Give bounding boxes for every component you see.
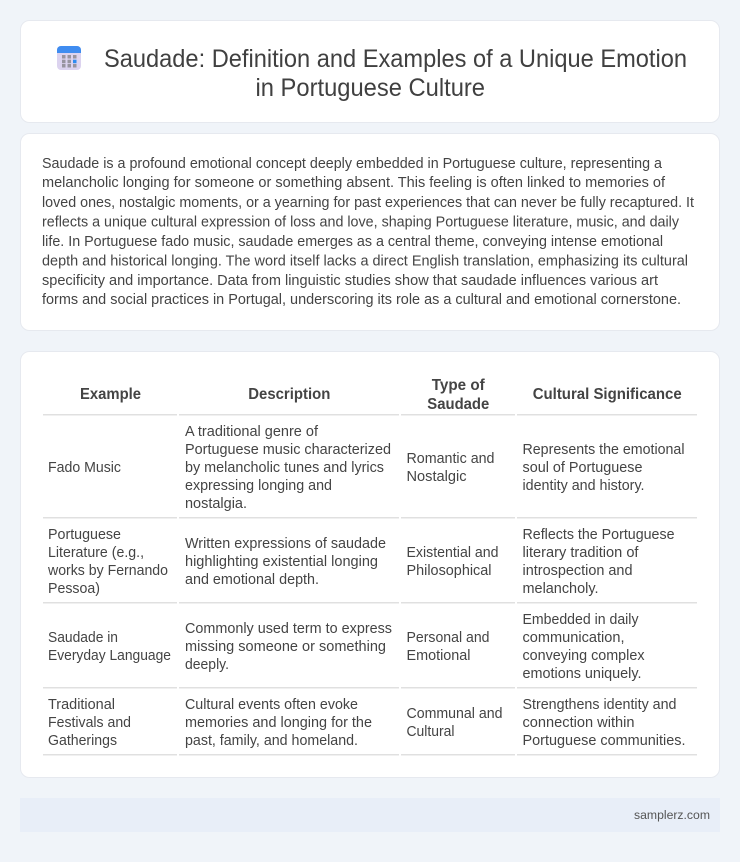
- table header: Description: [248, 386, 330, 403]
- panel: title card: [20, 20, 720, 122]
- row: Portuguese Literature: Written expressions of saudade: [185, 536, 386, 552]
- table header: Type of: [432, 377, 486, 394]
- row: Fado Music: Fado Music: [48, 460, 121, 476]
- row: Saudade in Everyday Language: Embedded in daily: [522, 612, 639, 628]
- title: [104, 45, 687, 102]
- row: Portuguese Literature: Pessoa): [48, 581, 100, 597]
- table header: Example: [80, 386, 141, 403]
- table rules: [43, 414, 697, 756]
- row: Saudade in Everyday Language: Saudade in: [48, 630, 118, 646]
- row: Traditional Festivals and Gatherings: memories and longing for the: [185, 715, 372, 731]
- row: Fado Music: Nostalgic: [406, 469, 466, 485]
- icon: calendar: [57, 46, 81, 70]
- footer text: samplerz.com: [634, 808, 710, 822]
- row: Traditional Festivals and Gatherings: Cultural events often evoke: [185, 697, 358, 713]
- row: Traditional Festivals and Gatherings: Cultural: [406, 724, 454, 740]
- row: Fado Music: Portuguese music characterized: [185, 442, 391, 458]
- row: Saudade in Everyday Language: Commonly used term to express: [185, 621, 392, 637]
- row: Fado Music: nostalgia.: [185, 496, 247, 512]
- row: Portuguese Literature: Literature (e.g.,: [48, 545, 144, 561]
- table header: Saudade: [427, 396, 490, 413]
- row: Portuguese Literature: and emotional depth.: [185, 572, 319, 588]
- panel: examples table: [20, 352, 720, 778]
- row: Portuguese Literature: works by Fernando: [47, 563, 168, 579]
- text block: definition: melancholic longing for someone or something absent. This feeling is often linked to memories of: [42, 175, 665, 191]
- row: Traditional Festivals and Gatherings: connection within: [522, 715, 635, 731]
- row: Traditional Festivals and Gatherings: Traditional: [48, 697, 115, 713]
- row: Saudade in Everyday Language: emotions uniquely.: [522, 666, 642, 682]
- row: Fado Music: Romantic and: [406, 451, 495, 467]
- row: Traditional Festivals and Gatherings: Festivals and: [48, 715, 131, 731]
- row: Fado Music: by melancholic tunes and lyrics: [185, 460, 384, 476]
- row: Traditional Festivals and Gatherings: Gatherings: [48, 733, 117, 749]
- row: Traditional Festivals and Gatherings: [48, 697, 686, 749]
- row: Portuguese Literature: melancholy.: [522, 581, 598, 597]
- row: Portuguese Literature: introspection and: [522, 563, 633, 579]
- table header: [80, 377, 682, 413]
- title: in Portuguese Culture: [256, 74, 485, 102]
- text block: definition: reflects a unique cultural expression of loss and love, shaping Portuguese literature, music, and daily: [42, 214, 680, 230]
- row: Fado Music: A traditional genre of: [185, 424, 318, 440]
- row: Portuguese Literature: Existential and: [406, 545, 499, 561]
- table header: Cultural Significance: [533, 386, 682, 403]
- row: Portuguese Literature: highlighting existential longing: [185, 554, 378, 570]
- row: Fado Music: identity and history.: [522, 478, 644, 494]
- row: Fado Music: expressing longing and: [185, 478, 332, 494]
- row: Saudade in Everyday Language: Emotional: [406, 648, 470, 664]
- title: Saudade: Definition and Examples of a Unique Emotion: [104, 45, 687, 73]
- row: Saudade in Everyday Language: missing someone or something: [185, 639, 386, 655]
- row: Saudade in Everyday Language: communication,: [522, 630, 624, 646]
- row: Fado Music: soul of Portuguese: [522, 460, 643, 476]
- row: Traditional Festivals and Gatherings: past, family, and homeland.: [185, 733, 358, 749]
- row: Saudade in Everyday Language: conveying complex: [522, 648, 644, 664]
- panel: intro paragraph: [20, 134, 720, 330]
- row: Traditional Festivals and Gatherings: Communal and: [406, 706, 503, 722]
- row: Saudade in Everyday Language: Personal and: [406, 630, 490, 646]
- text block: definition: forms and social practices in Portugal, underscoring its role as a cultural and emotional cornerstone.: [42, 292, 681, 308]
- row: Saudade in Everyday Language: deeply.: [185, 657, 229, 673]
- row: Portuguese Literature: literary tradition of: [522, 545, 639, 561]
- row: Traditional Festivals and Gatherings: Strengthens identity and: [522, 697, 677, 713]
- text block: definition: specificity and importance. Data from linguistic studies show that saudade influences various art: [42, 273, 658, 289]
- row: Saudade in Everyday Language: [48, 612, 644, 682]
- text block: definition: loved ones, nostalgic moments, or a yearning for past experiences that can never be fully recaptured. It: [42, 195, 694, 211]
- text block: definition: depth and historical longing. The word itself lacks a direct English translation, emphasizing its cultural: [42, 254, 688, 270]
- footer bar: [20, 798, 720, 832]
- text block: definition: [42, 156, 694, 308]
- row: Fado Music: [48, 424, 684, 512]
- row: Traditional Festivals and Gatherings: Portuguese communities.: [522, 733, 686, 749]
- text block: definition: life. In Portuguese fado music, saudade emerges as a central theme, conveying intense emotional: [42, 234, 663, 250]
- row: Saudade in Everyday Language: Everyday Language: [48, 648, 171, 664]
- row: Fado Music: Represents the emotional: [522, 442, 684, 458]
- row: Portuguese Literature: [47, 527, 675, 597]
- row: Portuguese Literature: Reflects the Portuguese: [522, 527, 675, 543]
- row: Portuguese Literature: Portuguese: [48, 527, 121, 543]
- row: Portuguese Literature: Philosophical: [406, 563, 492, 579]
- text block: definition: Saudade is a profound emotional concept deeply embedded in Portuguese culture, representing a: [42, 156, 662, 172]
